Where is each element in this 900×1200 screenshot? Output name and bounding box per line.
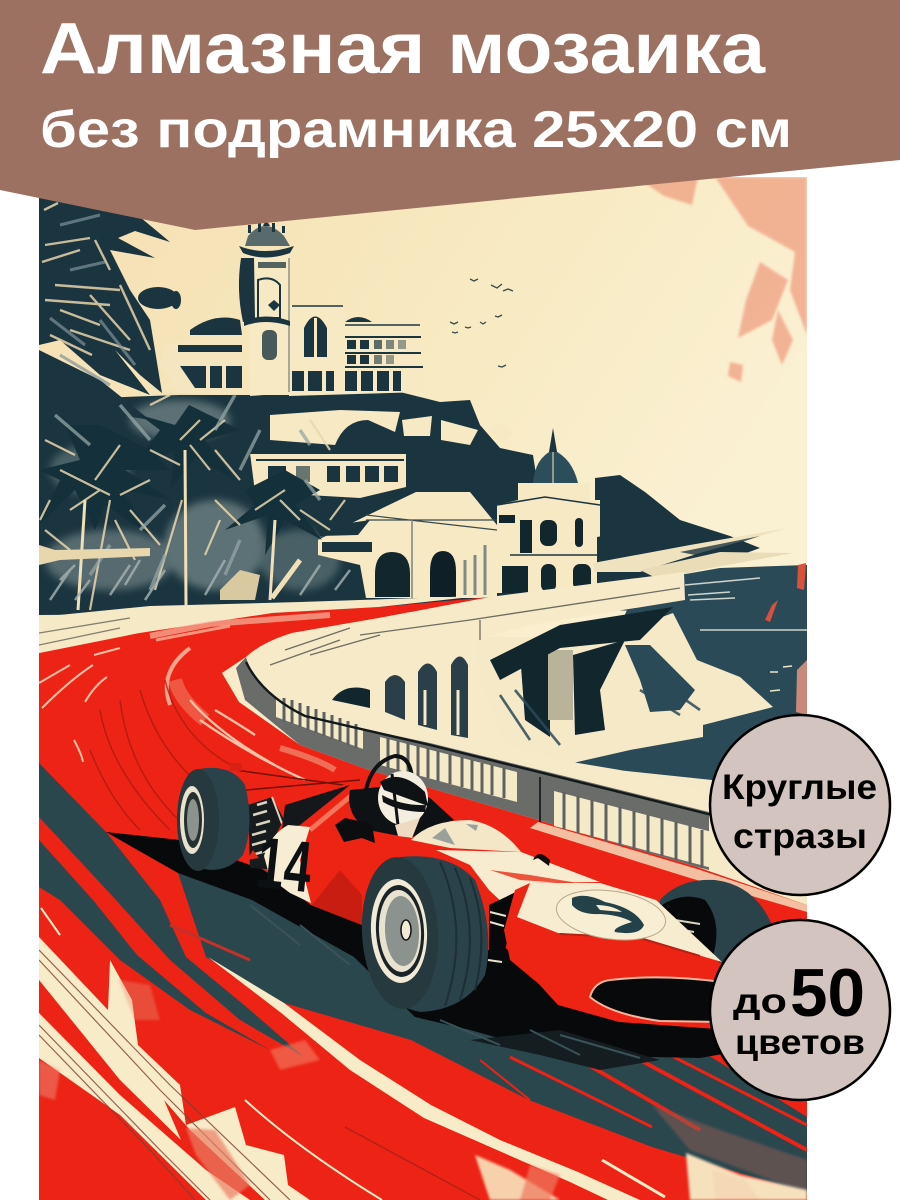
textured blotches xyxy=(39,980,807,1200)
pale road edge top xyxy=(39,596,480,653)
sky xyxy=(39,177,807,637)
casino building with arches xyxy=(316,492,497,598)
nose grille xyxy=(590,977,722,1022)
number 14: 14 xyxy=(253,823,315,908)
inner road edge xyxy=(222,657,376,770)
lower road left stripe xyxy=(39,763,304,1057)
pink paint splashes xyxy=(636,177,807,382)
balustrade wall xyxy=(236,657,712,870)
badge: up to 50 colors: 50 xyxy=(790,955,865,1031)
badge: round rhinestones: Круглые xyxy=(722,768,877,807)
asphalt speed streaks xyxy=(480,1055,807,1150)
rear suspension xyxy=(247,797,295,870)
driver helmet xyxy=(366,756,428,838)
body lower shading xyxy=(312,870,362,925)
foreground shrubs xyxy=(39,545,350,600)
main cream stripe with spikes xyxy=(39,937,310,1200)
cream line below wall xyxy=(530,822,807,912)
left shaded building xyxy=(39,363,90,412)
front wheel xyxy=(358,855,488,1012)
sea xyxy=(570,565,807,790)
far rear wheel xyxy=(655,880,772,965)
subtitle: без подрамника 25х20 см xyxy=(40,101,792,159)
seawall top xyxy=(246,572,685,771)
poster illustration xyxy=(39,177,807,1200)
road highlights xyxy=(39,615,335,780)
top left palm xyxy=(39,193,170,420)
badge: up to 50 colors xyxy=(710,920,890,1100)
nose number 9 xyxy=(553,884,669,946)
upper terrace building xyxy=(250,451,407,498)
palace terrace xyxy=(138,287,242,393)
badge: round rhinestones: стразы xyxy=(733,817,867,856)
rear wing rods xyxy=(235,770,360,790)
number panel xyxy=(264,825,311,903)
thin cream stripe xyxy=(208,957,640,1200)
nose lower red xyxy=(504,883,722,1025)
lower road thin stripe xyxy=(39,840,270,1050)
art base xyxy=(40,637,807,905)
front cream deck xyxy=(436,850,600,905)
badge: up to 50 colors: цветов xyxy=(735,1023,865,1062)
bridge arches xyxy=(332,656,468,738)
nose cream top xyxy=(517,883,722,962)
coastal structures and pier xyxy=(593,528,793,585)
mirrors xyxy=(335,818,375,843)
header banner xyxy=(0,0,900,230)
windscreen xyxy=(411,820,521,852)
badge: up to 50 colors: до xyxy=(733,982,787,1021)
rear wing tab xyxy=(230,763,242,771)
asphalt band xyxy=(178,873,807,1193)
far mirror xyxy=(533,854,550,866)
tower xyxy=(239,222,294,396)
distant headland xyxy=(595,475,760,575)
rear wheel xyxy=(177,768,250,871)
body highlight xyxy=(310,795,352,830)
title: Алмазная мозаика xyxy=(40,9,766,89)
hill tonal patches xyxy=(45,400,340,590)
middle palm trees xyxy=(39,395,345,610)
cockpit xyxy=(349,785,454,838)
dark hillside xyxy=(39,392,690,615)
body dark panel xyxy=(282,785,350,830)
birds xyxy=(450,279,513,367)
car body xyxy=(264,783,600,950)
second cream stripe xyxy=(39,1013,250,1200)
badge: round rhinestones xyxy=(710,715,890,895)
thin lower road lines xyxy=(41,908,665,1200)
front suspension xyxy=(488,890,520,985)
domed villa xyxy=(497,428,600,593)
palace block xyxy=(289,305,424,396)
hill clearings xyxy=(270,410,478,445)
car shadow xyxy=(106,832,745,1058)
road base red xyxy=(39,597,807,1200)
cliff and surf xyxy=(470,607,773,763)
racing car xyxy=(106,756,772,1070)
